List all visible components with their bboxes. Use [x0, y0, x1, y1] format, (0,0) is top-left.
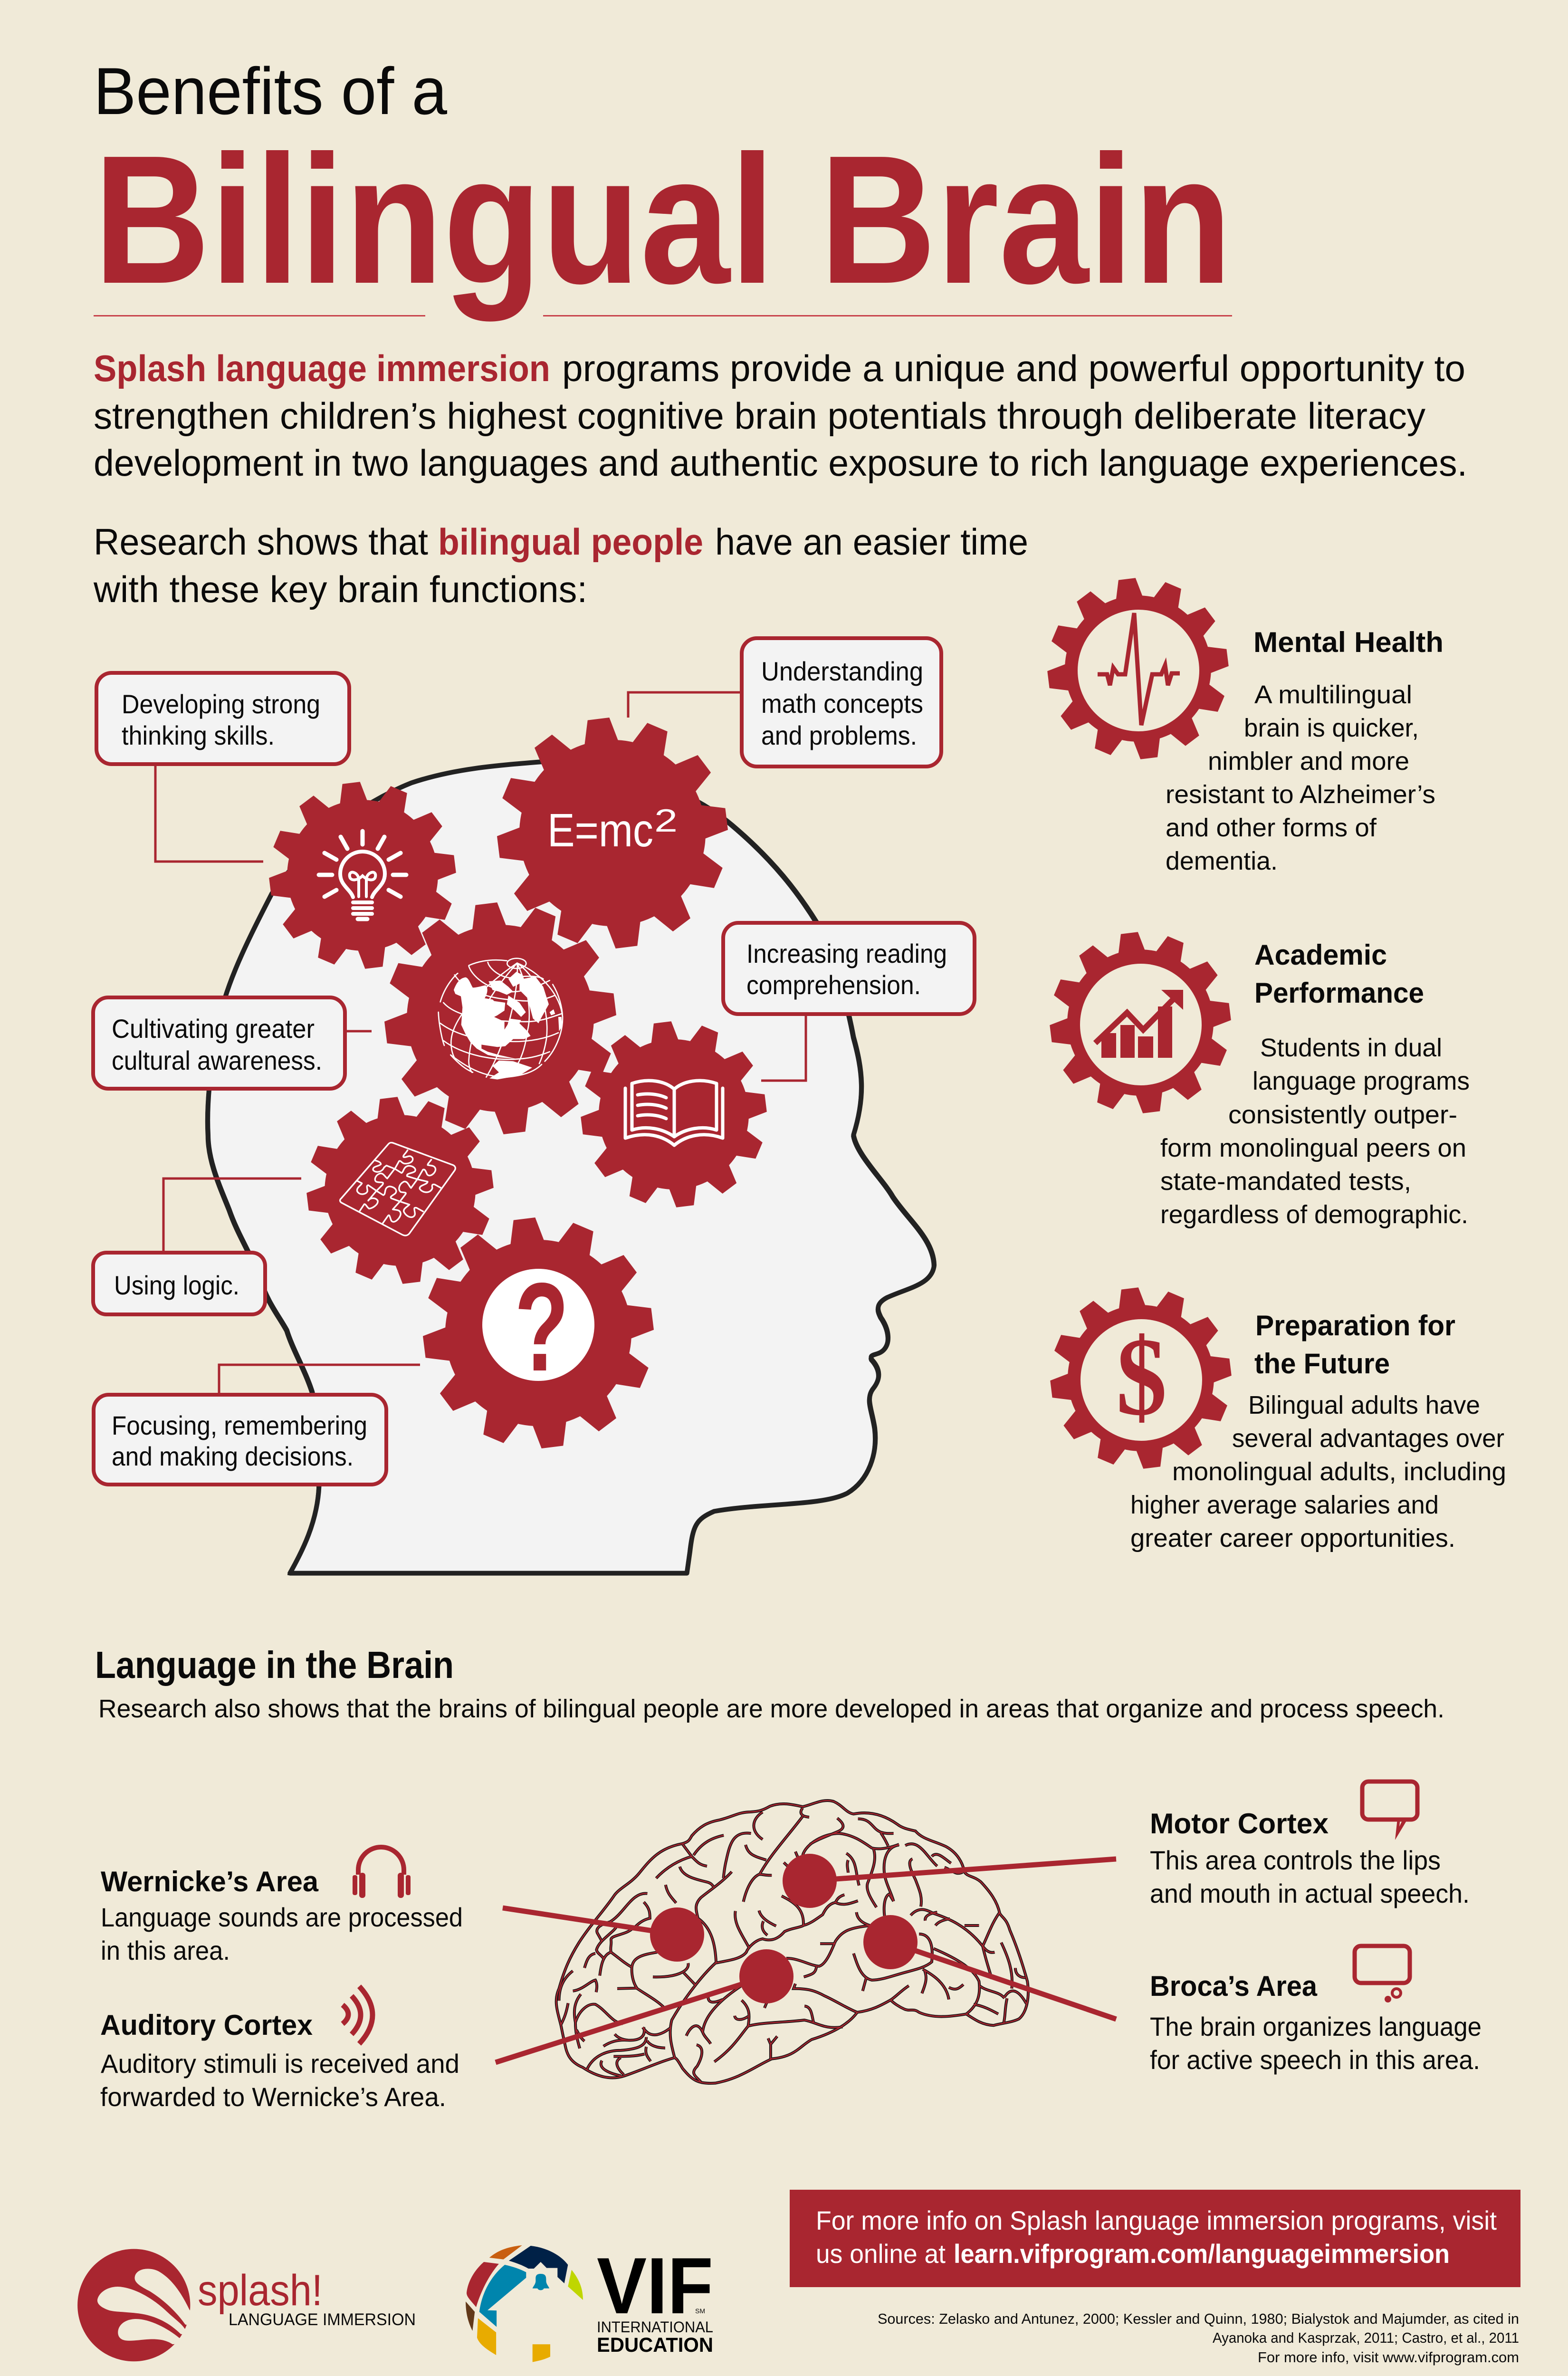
panel: wernicke's area: Language sounds are processed	[101, 1902, 463, 1932]
callout: thinking skills: Developing strong	[122, 689, 320, 719]
callout: reading comprehension	[723, 923, 975, 1014]
brain pointer lines	[496, 1859, 1116, 2062]
panel: wernicke's area: in this area.	[101, 1935, 230, 1965]
icon: gear dollar	[1050, 1287, 1232, 1469]
heading: Preparation for	[1255, 1310, 1455, 1341]
icon: headphones	[353, 1847, 411, 1898]
gear: book	[580, 1021, 767, 1208]
panel: academic performance	[1049, 931, 1470, 1229]
heading	[1254, 939, 1424, 1009]
callout: math concepts: Understanding	[761, 656, 923, 686]
panel: motor cortex: Motor Cortex	[1150, 1808, 1329, 1839]
callout: using logic	[93, 1253, 265, 1314]
icon: sound waves	[343, 1986, 373, 2044]
logo: VIF international education: EDUCATION	[597, 2334, 713, 2357]
title line: Benefits of a: Benefits of a	[94, 54, 447, 128]
body text	[1130, 1391, 1506, 1552]
icon: question mark	[482, 1257, 594, 1398]
icon: gear heartbeat	[1047, 577, 1229, 760]
sources: Sources: Zelasko and Antunez, 2000; Kessler and Quinn, 1980; Bialystok and Majumder, as cited in	[878, 2310, 1519, 2327]
icon: gear chart	[1049, 931, 1232, 1114]
title	[94, 54, 1232, 323]
icon: globe	[439, 958, 563, 1080]
icon: open book	[625, 1081, 723, 1145]
callout: cultural awareness: cultural awareness.	[112, 1045, 322, 1075]
body text: monolingual adults, including	[1172, 1457, 1506, 1486]
research lead-in: Research shows that	[94, 521, 428, 563]
gear: lightbulb	[268, 781, 457, 969]
logo: splash language immersion	[77, 2249, 416, 2361]
icon: thought bubble	[1355, 1946, 1410, 2002]
logo: splash language immersion: LANGUAGE IMMERSION	[229, 2310, 416, 2329]
head illustration	[206, 760, 934, 1574]
intro paragraph: programs provide a unique and powerful opportunity to	[562, 347, 1465, 389]
panel: auditory cortex: forwarded to Wernicke’s Area.	[100, 2082, 446, 2112]
callout: more info banner: For more info on Splash language immersion programs, visit	[816, 2205, 1497, 2235]
sources: Ayanoka and Kasprzak, 2011; Castro, et al., 2011	[1213, 2329, 1519, 2346]
body text: consistently outper-	[1228, 1101, 1457, 1129]
subheading: Research also shows that the brains of bilingual people are more developed in areas that organize and process speech.	[98, 1695, 1444, 1723]
gear: puzzle	[306, 1096, 494, 1284]
icon: gear dollar: $	[1116, 1315, 1167, 1438]
gear: question mark	[422, 1217, 655, 1449]
intro paragraph: development in two languages and authentic exposure to rich language experiences.	[94, 442, 1467, 484]
logo: VIF international education: SM	[695, 2307, 705, 2315]
panel: broca's area	[1150, 1946, 1482, 2075]
heading: Mental Health	[1253, 626, 1444, 658]
heading: language in the brain: Language in the Brain	[95, 1644, 454, 1686]
body text: Students in dual	[1260, 1034, 1442, 1062]
callout: reading comprehension: comprehension.	[746, 970, 921, 1000]
panel: wernicke's area	[101, 1847, 463, 1965]
title line: Bilingual Brain: Bilingual Brain	[94, 117, 1232, 323]
body text	[1166, 680, 1435, 875]
panel: broca's area: Broca’s Area	[1150, 1970, 1318, 2002]
body text: Bilingual adults have	[1248, 1391, 1480, 1419]
body text: and other forms of	[1166, 814, 1377, 842]
callout: cultural awareness	[93, 997, 345, 1089]
callout: cultural awareness: Cultivating greater	[112, 1014, 315, 1044]
icon: splash mark	[77, 2249, 202, 2361]
research lead-in: bilingual people	[438, 521, 703, 563]
callout: more info banner: us online at	[816, 2239, 946, 2269]
callout: focusing: Focusing, remembering	[112, 1410, 367, 1440]
intro paragraph: Splash language immersion	[94, 347, 550, 389]
body text: higher average salaries and	[1130, 1491, 1439, 1519]
callout: more info banner	[790, 2190, 1520, 2287]
panel: auditory cortex: Auditory Cortex	[100, 2009, 313, 2041]
logo: VIF international education: INTERNATIONAL	[597, 2319, 713, 2336]
callout: focusing: and making decisions.	[112, 1441, 354, 1471]
sources	[878, 2310, 1519, 2366]
body text: nimbler and more	[1208, 747, 1409, 776]
research lead-in	[93, 521, 1028, 610]
body text: several advantages over	[1232, 1424, 1504, 1453]
body text: regardless of demographic.	[1160, 1200, 1468, 1229]
connector lines	[155, 692, 806, 1393]
icon: question mark: ?	[515, 1257, 569, 1398]
panel: broca's area: The brain organizes language	[1150, 2012, 1482, 2041]
body text: language programs	[1252, 1067, 1470, 1095]
callout: focusing	[94, 1395, 386, 1485]
gear: globe	[383, 901, 617, 1135]
callout: thinking skills: thinking skills.	[122, 720, 275, 750]
heading: Performance	[1254, 977, 1424, 1009]
research lead-in: with these key brain functions:	[93, 568, 587, 610]
body text: greater career opportunities.	[1130, 1524, 1455, 1552]
logo: VIF international education	[466, 2241, 713, 2362]
icon: speech bubble	[1362, 1782, 1417, 1840]
body text: brain is quicker,	[1244, 714, 1419, 742]
body text: dementia.	[1166, 847, 1278, 875]
callout: math concepts	[742, 638, 941, 766]
panel: broca's area: for active speech in this area.	[1150, 2045, 1480, 2075]
brain region markers	[650, 1854, 918, 2003]
panel: mental health	[1047, 577, 1444, 875]
heading: Academic	[1254, 939, 1387, 971]
research lead-in: have an easier time	[715, 521, 1028, 563]
body text	[1160, 1034, 1470, 1229]
body text: A multilingual	[1254, 680, 1412, 709]
callout: more info banner: learn.vifprogram.com/languageimmersion	[954, 2239, 1450, 2269]
heading	[1254, 1310, 1455, 1380]
panel: motor cortex: This area controls the lips	[1150, 1845, 1441, 1875]
sources: For more info, visit www.vifprogram.com	[1258, 2349, 1519, 2366]
panel: auditory cortex: Auditory stimuli is received and	[101, 2049, 459, 2079]
callout: thinking skills	[96, 673, 349, 764]
icon: formula: 2	[654, 803, 678, 839]
panel: motor cortex	[1150, 1782, 1470, 1908]
callout: using logic: Using logic.	[114, 1270, 239, 1300]
icon: VIF globe house	[466, 2245, 583, 2362]
heading: the Future	[1254, 1348, 1390, 1380]
intro paragraph	[94, 347, 1467, 484]
panel: preparation for the future	[1050, 1287, 1506, 1552]
callout: math concepts: and problems.	[761, 720, 917, 750]
logo: splash language immersion: splash!	[198, 2266, 323, 2315]
icon: formula: E=mc	[547, 804, 653, 856]
callout: math concepts: math concepts	[761, 689, 923, 719]
panel: wernicke's area: Wernicke’s Area	[101, 1866, 319, 1897]
callout: reading comprehension: Increasing reading	[746, 939, 947, 968]
gear: E=mc2	[496, 717, 729, 949]
body text: resistant to Alzheimer’s	[1166, 780, 1435, 809]
icon: lightbulb	[319, 831, 406, 919]
panel: motor cortex: and mouth in actual speech.	[1150, 1878, 1470, 1908]
icon: puzzle	[340, 1142, 455, 1236]
logo: VIF international education: VIF	[597, 2241, 713, 2330]
body text: state-mandated tests,	[1160, 1167, 1411, 1196]
panel: auditory cortex	[100, 1986, 459, 2112]
body text: form monolingual peers on	[1160, 1134, 1466, 1162]
brain illustration	[496, 1801, 1116, 2083]
intro paragraph: strengthen children’s highest cognitive brain potentials through deliberate literacy	[94, 395, 1425, 437]
